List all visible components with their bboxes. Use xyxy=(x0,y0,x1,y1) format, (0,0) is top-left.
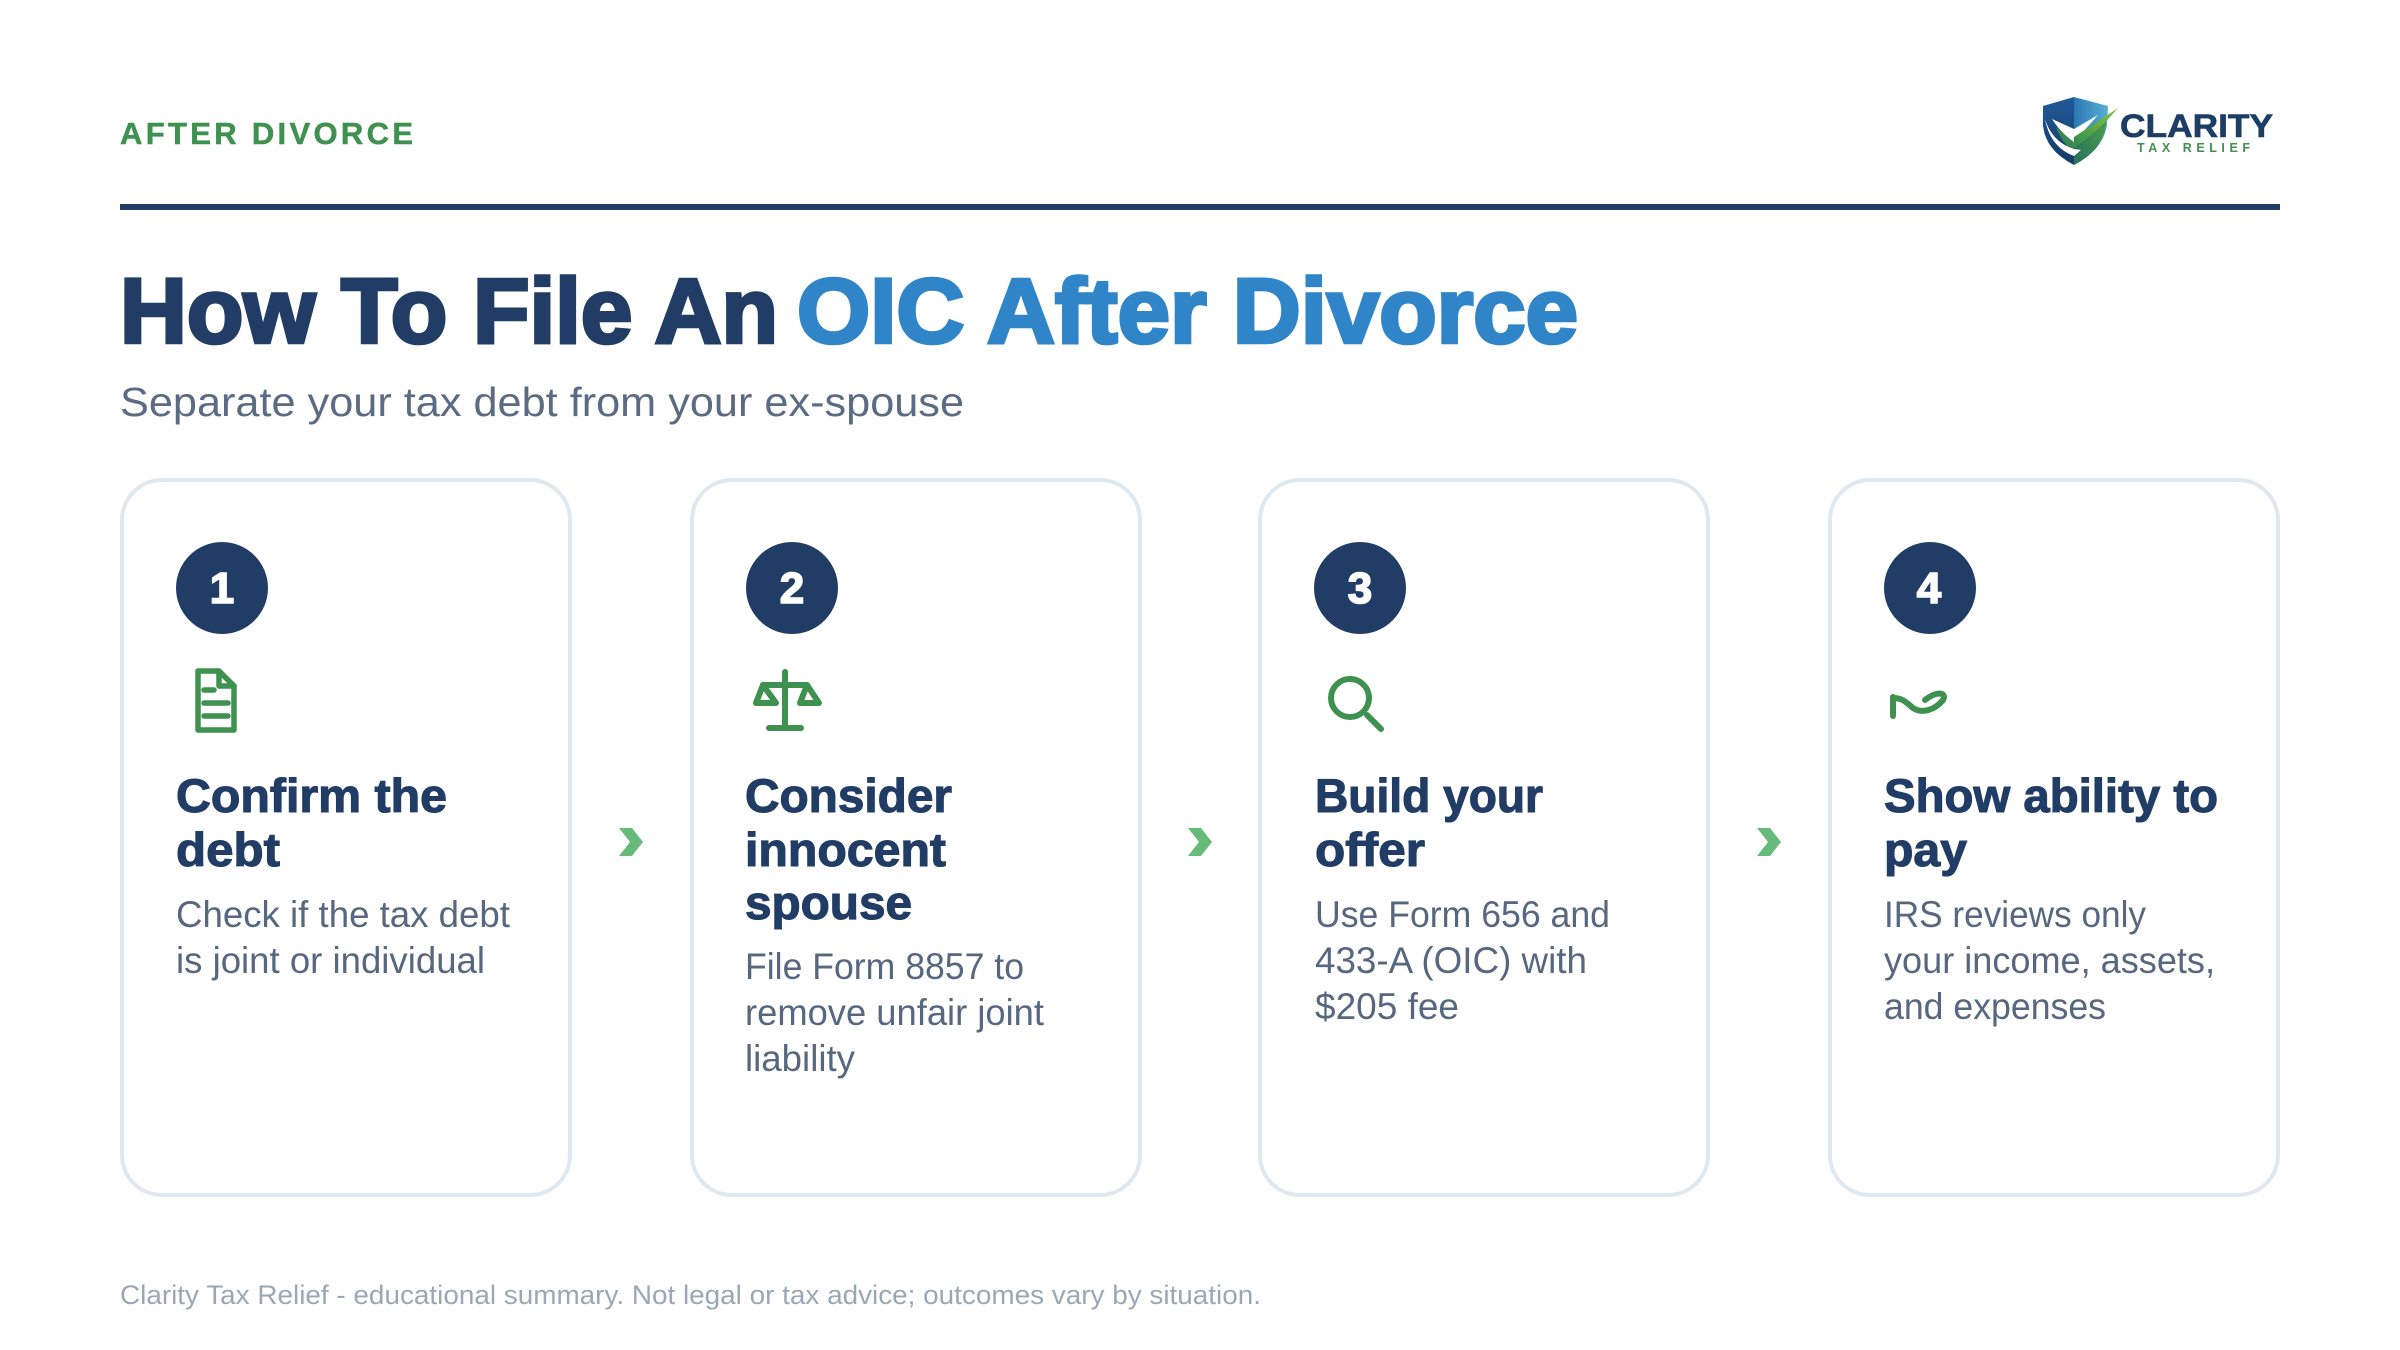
body text: and expenses xyxy=(1884,986,2106,1027)
icon: shield with check xyxy=(2043,97,2118,165)
panel: step 2 xyxy=(692,480,1140,1195)
step number 2: 2 xyxy=(780,564,804,613)
heading: show ability to pay: Show ability to xyxy=(1884,769,2218,822)
body text: remove unfair joint xyxy=(745,992,1045,1033)
arrow 1 xyxy=(619,828,643,856)
heading: build your offer: offer xyxy=(1315,823,1425,876)
step number 3 xyxy=(1314,542,1406,634)
eyebrow label: AFTER DIVORCE xyxy=(120,116,413,151)
title: OIC After Divorce xyxy=(797,260,1578,362)
heading: build your offer xyxy=(1315,769,1543,876)
heading: show ability to pay xyxy=(1884,769,2218,876)
logo wordmark: CLARITY xyxy=(2120,108,2273,144)
body text xyxy=(1315,894,1610,1027)
heading: consider innocent spouse: innocent xyxy=(745,823,946,876)
title: How To File An xyxy=(120,260,778,362)
step number 1: 1 xyxy=(210,564,234,613)
body text xyxy=(176,894,511,981)
title xyxy=(120,260,1578,362)
heading: confirm the debt xyxy=(176,769,447,876)
arrow 2 xyxy=(1188,828,1212,856)
icon: magnifier xyxy=(1331,679,1381,729)
icon: scales xyxy=(756,672,819,728)
step number 4: 4 xyxy=(1917,564,1942,613)
icon: document xyxy=(198,671,234,730)
icon: open hand squiggle xyxy=(1893,694,1944,716)
logo: Clarity Tax Relief xyxy=(2043,97,2273,165)
step number 4 xyxy=(1884,542,1976,634)
heading: show ability to pay: pay xyxy=(1884,823,1967,876)
body text: Use Form 656 and xyxy=(1315,894,1610,935)
body text: Check if the tax debt xyxy=(176,894,511,935)
body text: $205 fee xyxy=(1315,986,1459,1027)
body text xyxy=(1884,894,2215,1027)
panel: step 4 xyxy=(1830,480,2278,1195)
body text: liability xyxy=(745,1038,855,1079)
heading: consider innocent spouse: spouse xyxy=(745,876,912,929)
body text: is joint or individual xyxy=(176,940,485,981)
body text xyxy=(745,946,1045,1079)
body text: IRS reviews only xyxy=(1884,894,2146,935)
panel: step 3 xyxy=(1260,480,1708,1195)
step number 3: 3 xyxy=(1348,564,1372,613)
arrow 3 xyxy=(1757,828,1781,856)
subtitle: Separate your tax debt from your ex-spouse xyxy=(120,379,964,425)
header rule xyxy=(120,204,2280,210)
step number 2 xyxy=(746,542,838,634)
panel: step 1 xyxy=(122,480,570,1195)
logo tagline: TAX RELIEF xyxy=(2137,141,2250,155)
heading: consider innocent spouse xyxy=(745,769,952,929)
step number 1 xyxy=(176,542,268,634)
heading: confirm the debt: Confirm the xyxy=(176,769,447,822)
heading: confirm the debt: debt xyxy=(176,823,280,876)
heading: build your offer: Build your xyxy=(1315,769,1543,822)
body text: 433-A (OIC) with xyxy=(1315,940,1587,981)
body text: File Form 8857 to xyxy=(745,946,1024,987)
body text: your income, assets, xyxy=(1884,940,2215,981)
footer disclaimer: Clarity Tax Relief - educational summary. Not legal or tax advice; outcomes vary by situation. xyxy=(120,1280,1261,1310)
heading: consider innocent spouse: Consider xyxy=(745,769,952,822)
